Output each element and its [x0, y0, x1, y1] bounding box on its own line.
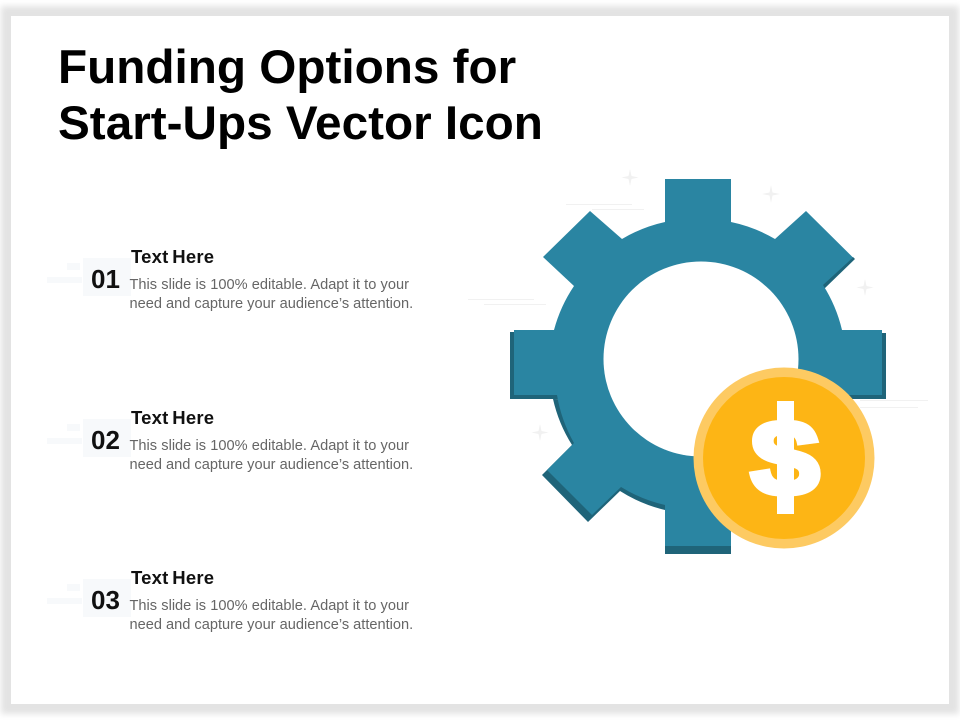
description 01: [130, 277, 413, 312]
gear shadow: [510, 257, 886, 554]
list item 01: [91, 246, 413, 312]
description 01: This slide is 100% editable. Adapt it to your: [130, 277, 409, 293]
number 01: 01: [91, 264, 120, 294]
title: [58, 40, 543, 150]
list item 03: [91, 567, 413, 633]
gear body: [514, 179, 882, 546]
description 03: [130, 598, 413, 633]
list item 02: [91, 407, 413, 473]
heading 02: Text Here: [131, 407, 214, 428]
description 03: need and capture your audience’s attention.: [130, 617, 413, 633]
dollar sign: $: [750, 398, 820, 519]
number 03: 03: [91, 585, 120, 615]
heading 01: Text Here: [131, 246, 214, 267]
description 02: This slide is 100% editable. Adapt it to your: [130, 438, 409, 454]
title: Funding Options for: [58, 40, 516, 94]
gear hole: [604, 262, 798, 456]
dollar coin: [694, 368, 874, 548]
title: Start-Ups Vector Icon: [58, 96, 543, 150]
number 02: 02: [91, 425, 120, 455]
decorative sparkles and speed lines: [468, 169, 928, 441]
description 02: need and capture your audience’s attention.: [130, 457, 413, 473]
description 02: [130, 438, 413, 473]
gear: [510, 179, 886, 554]
description 01: need and capture your audience’s attention.: [130, 296, 413, 312]
description 03: This slide is 100% editable. Adapt it to your: [130, 598, 409, 614]
heading 03: Text Here: [131, 567, 214, 588]
